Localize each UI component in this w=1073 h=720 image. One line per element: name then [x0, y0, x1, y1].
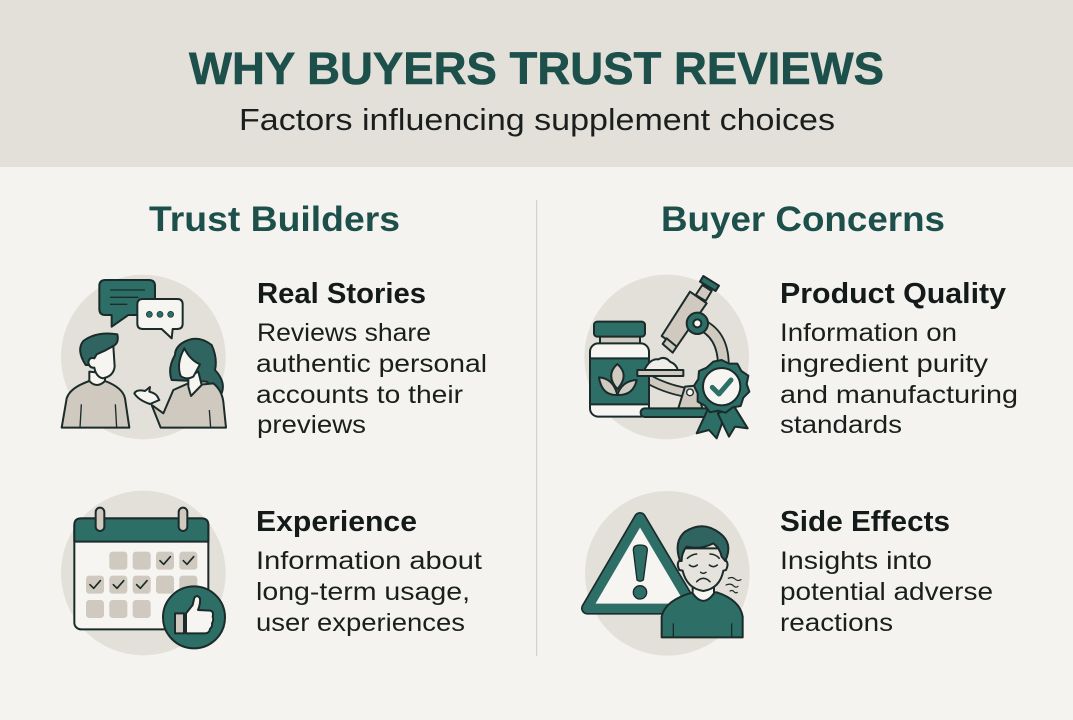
header band [0, 0, 1073, 167]
text: real stories [256, 278, 487, 439]
text: side effects: Side Effects [780, 506, 950, 538]
text: side effects [780, 506, 993, 637]
text: experience: long-term usage, [256, 578, 470, 606]
text: side effects: potential adverse [780, 578, 993, 606]
text: real stories: Reviews share [257, 319, 431, 347]
text: product quality: standards [780, 411, 902, 439]
text: real stories: accounts to their [256, 381, 463, 409]
panel: buyer concerns [584, 200, 1018, 656]
text: experience: user experiences [256, 609, 465, 637]
text: real stories: authentic personal [256, 350, 487, 378]
text: experience [256, 506, 482, 637]
panel: trust builders [61, 200, 487, 655]
icon: warning triangle and unwell person [585, 491, 750, 656]
heading: buyer concerns: Buyer Concerns [661, 200, 945, 239]
text: real stories: Real Stories [257, 278, 426, 310]
text: product quality: ingredient purity [780, 350, 989, 378]
text: real stories: previews [257, 411, 366, 439]
icon: supplement jar, microscope and quality badge [584, 275, 749, 439]
text: product quality: Product Quality [780, 278, 1006, 310]
heading: trust builders: Trust Builders [149, 200, 400, 239]
text: product quality: Information on [780, 319, 957, 347]
text: experience: Information about [256, 547, 482, 575]
text: experience: Experience [256, 506, 417, 538]
text: side effects: Insights into [780, 547, 932, 575]
text: product quality [780, 278, 1018, 439]
icon: calendar with thumbs up [61, 491, 226, 655]
text: side effects: reactions [780, 609, 893, 637]
text: product quality: and manufacturing [780, 381, 1018, 409]
subtitle: Factors influencing supplement choices [239, 102, 835, 137]
title: WHY BUYERS TRUST REVIEWS [189, 43, 884, 94]
icon: conversation between two people [61, 275, 226, 439]
